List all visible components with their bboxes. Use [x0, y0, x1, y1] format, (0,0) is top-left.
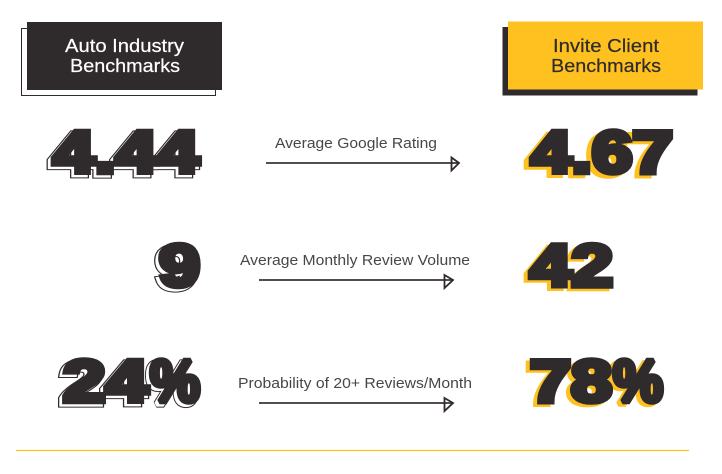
stat: invite monthly volume 42: 42 [526, 236, 609, 302]
stat: invite probability 78%: % [609, 351, 659, 417]
stat: invite probability 78%: % [613, 348, 663, 414]
panel: invite client header [502, 22, 703, 96]
label and arrow: average monthly review volume [240, 252, 470, 288]
stat: auto google rating 4.44: 4.44 [50, 122, 196, 188]
label and arrow: average monthly review volume: Average Monthly Review Volume [240, 252, 470, 269]
label and arrow: average google rating: Average Google Rating [275, 135, 437, 152]
stat: invite probability 78%: 78 [526, 351, 608, 417]
stat: auto probability 24%: 24 [63, 348, 148, 414]
panel: auto industry header: Auto Industry [65, 36, 184, 56]
stat: auto probability 24%: % [150, 348, 200, 414]
panel: auto industry header [22, 22, 222, 96]
panel: invite client header: Benchmarks [551, 56, 661, 76]
stat: invite monthly volume 42: 42 [530, 233, 613, 299]
stat: auto google rating 4.44: 4.44 [50, 122, 196, 188]
stat: auto probability 24% [60, 348, 200, 417]
stat: invite probability 78% [526, 348, 663, 417]
stat: auto probability 24%: 24 [60, 351, 145, 417]
label and arrow: probability of 20+ reviews per month: Probability of 20+ Reviews/Month [238, 375, 472, 392]
panel: invite client header: Invite Client [553, 36, 659, 56]
stat: invite probability 78%: 78 [530, 348, 612, 414]
stat: invite google rating 4.67: 4.67 [526, 122, 668, 188]
stat: auto monthly volume 9: 9 [156, 236, 197, 302]
label and arrow: average google rating [266, 135, 459, 170]
stat: auto monthly volume 9: 9 [159, 233, 200, 299]
stat: auto monthly volume 9: 9 [156, 236, 197, 302]
stat: auto google rating 4.44: 4.44 [53, 120, 199, 186]
footer rule [16, 450, 689, 452]
label and arrow: probability of 20+ reviews per month [238, 375, 472, 411]
stat: invite google rating 4.67: 4.67 [531, 120, 673, 186]
stat: auto probability 24%: 24 [60, 351, 145, 417]
stat: auto probability 24%: % [147, 351, 197, 417]
stat: auto probability 24%: % [147, 351, 197, 417]
panel: auto industry header: Benchmarks [70, 56, 180, 76]
